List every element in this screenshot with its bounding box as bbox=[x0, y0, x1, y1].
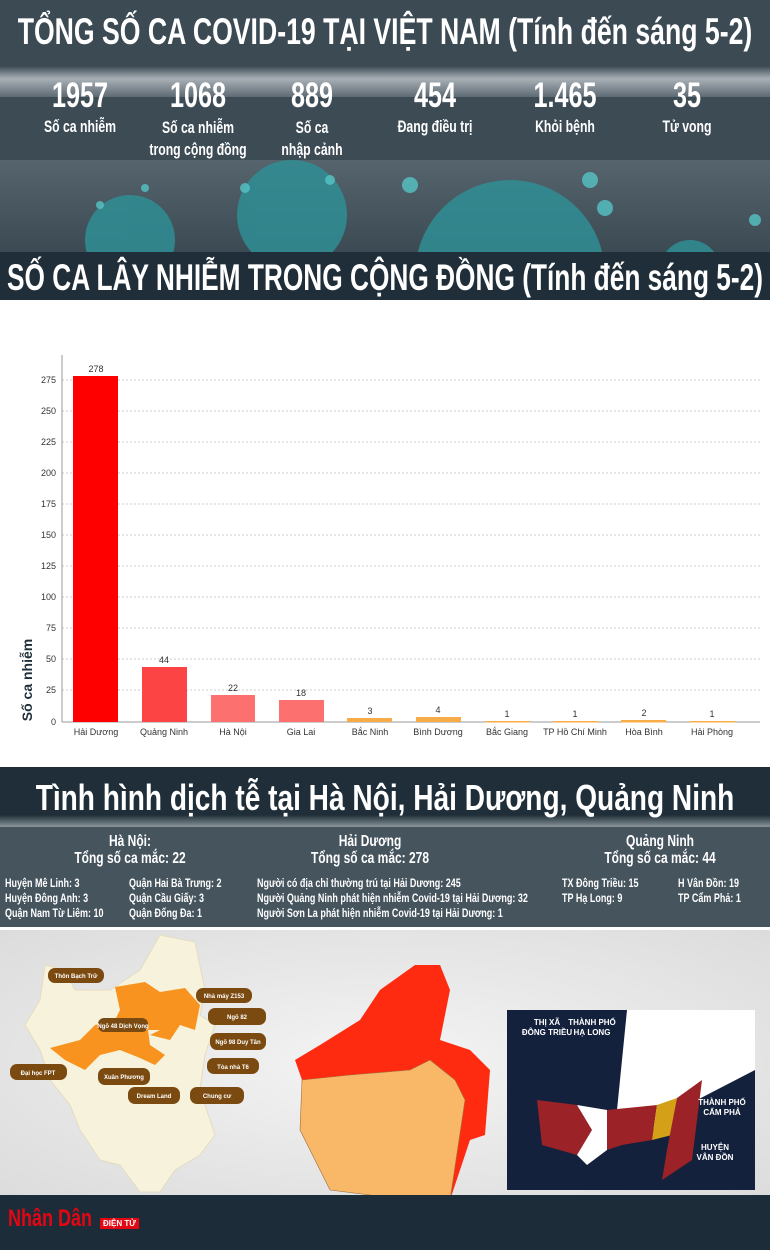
bar chart: Hải Phòng bbox=[691, 727, 733, 737]
Hà Nội block: Quận Cầu Giấy: 3 bbox=[129, 891, 204, 905]
bar chart: 75 bbox=[46, 623, 56, 633]
virus illustration band bbox=[0, 160, 770, 255]
bar chart: 22 bbox=[228, 683, 238, 693]
Quảng Ninh block: TP Cẩm Phả: 1 bbox=[678, 891, 741, 905]
stat 1957: 1957 bbox=[52, 76, 108, 115]
Quảng Ninh block: Quảng Ninh bbox=[626, 833, 694, 850]
stat 1.465 bbox=[533, 76, 597, 136]
header band: title bbox=[0, 0, 770, 66]
map: Quảng Ninh: HẠ LONG bbox=[574, 1028, 610, 1037]
Hải Dương block: Người Quảng Ninh phát hiện nhiễm Covid-19 tại Hải Dương: 32 bbox=[257, 891, 528, 905]
stat 1957 bbox=[44, 76, 116, 136]
bar chart: 18 bbox=[296, 688, 306, 698]
stat 889: nhập cảnh bbox=[281, 140, 343, 159]
section heading: epidemiology bbox=[0, 767, 770, 827]
section heading: community cases: SỐ CA LÂY NHIỄM TRONG CỘNG ĐỒNG (Tính đến sáng 5-2) bbox=[7, 257, 763, 298]
Hà Nội block: Hà Nội: bbox=[109, 833, 151, 850]
Hà Nội block: Quận Hai Bà Trưng: 2 bbox=[129, 876, 222, 890]
bar chart: 1 bbox=[709, 709, 715, 719]
bar chart: 44 bbox=[159, 655, 169, 665]
map: Quảng Ninh: THÀNH PHỐ bbox=[698, 1097, 746, 1107]
Quảng Ninh block: H Vân Đồn: 19 bbox=[678, 876, 739, 890]
Quảng Ninh block: Tổng số ca mắc: 44 bbox=[604, 850, 716, 867]
bar chart: Hải Dương bbox=[74, 727, 118, 737]
maps area bbox=[0, 930, 770, 1195]
bar chart: 278 bbox=[88, 364, 104, 374]
bar chart: 3 bbox=[367, 706, 373, 716]
Hà Nội block: Quận Nam Từ Liêm: 10 bbox=[5, 906, 104, 920]
panel: stats bbox=[0, 97, 770, 162]
Quảng Ninh block: TP Hạ Long: 9 bbox=[562, 891, 622, 905]
section heading: epidemiology: Tình hình dịch tễ tại Hà Nội, Hải Dương, Quảng Ninh bbox=[36, 777, 734, 818]
logo: Nhân Dân: ĐIỆN TỬ bbox=[103, 1219, 136, 1228]
Hà Nội block bbox=[5, 833, 222, 920]
stat 35: Tử vong bbox=[663, 117, 711, 136]
Hà Nội block: Huyện Mê Linh: 3 bbox=[5, 876, 80, 890]
stat 454 bbox=[398, 76, 472, 136]
map: Quảng Ninh: THÀNH PHỐ bbox=[568, 1017, 616, 1027]
Hà Nội block: Tổng số ca mắc: 22 bbox=[74, 850, 186, 867]
bar chart: Gia Lai bbox=[287, 727, 315, 737]
logo: Nhân Dân: Nhân Dân bbox=[8, 1205, 92, 1232]
map: Quảng Ninh: VÂN ĐỒN bbox=[697, 1152, 734, 1162]
bar chart: 100 bbox=[41, 592, 56, 602]
map: Hà Nội: Ngõ 98 Duy Tân bbox=[215, 1040, 261, 1046]
panel: region details bbox=[0, 827, 770, 927]
stat 889: 889 bbox=[291, 76, 333, 115]
map: Hải Dương bbox=[295, 965, 490, 1195]
map: Hà Nội: Ngõ 82 bbox=[227, 1015, 248, 1021]
bar chart: 200 bbox=[41, 468, 56, 478]
stat 889 bbox=[281, 76, 343, 159]
Hà Nội block: Huyện Đông Anh: 3 bbox=[5, 891, 88, 905]
bar chart: Bắc Giang bbox=[486, 727, 528, 737]
stat 1068 bbox=[149, 76, 246, 159]
map: Quảng Ninh: ĐÔNG TRIỀU bbox=[522, 1027, 572, 1037]
title: TỔNG SỐ CA COVID-19 TẠI VIỆT NAM (Tính đến sáng 5-2) bbox=[18, 11, 752, 52]
bar chart: 1 bbox=[504, 709, 510, 719]
bar chart: TP Hồ Chí Minh bbox=[543, 727, 607, 737]
bar chart: 275 bbox=[41, 375, 56, 385]
stat 1.465: 1.465 bbox=[533, 76, 597, 115]
logo: Nhân Dân bbox=[8, 1205, 139, 1232]
stat 1068: Số ca nhiễm bbox=[161, 118, 234, 137]
Hải Dương block: Người Sơn La phát hiện nhiễm Covid-19 tại Hải Dương: 1 bbox=[257, 906, 503, 920]
bar chart: 175 bbox=[41, 499, 56, 509]
map: Hà Nội: Xuân Phương bbox=[104, 1075, 144, 1081]
bar chart bbox=[0, 300, 770, 767]
Hải Dương block bbox=[257, 833, 528, 920]
map: Hà Nội: Thôn Bạch Trữ bbox=[55, 974, 98, 980]
map: Hà Nội: Nhà máy Z153 bbox=[204, 994, 245, 1000]
Hải Dương block: Hải Dương bbox=[339, 833, 401, 850]
stat 889: Số ca bbox=[296, 118, 328, 137]
stat 1.465: Khỏi bệnh bbox=[535, 117, 595, 136]
bar chart: Bình Dương bbox=[413, 727, 463, 737]
bar chart: 25 bbox=[46, 685, 56, 695]
map: Hà Nội bbox=[10, 934, 266, 1192]
stat 35 bbox=[662, 76, 711, 136]
bar chart: 150 bbox=[41, 530, 56, 540]
Hải Dương block: Tổng số ca mắc: 278 bbox=[311, 850, 429, 867]
map: Quảng Ninh: CẨM PHẢ bbox=[703, 1108, 741, 1117]
bar chart: Bắc Ninh bbox=[352, 727, 388, 737]
bar chart: 1 bbox=[572, 709, 578, 719]
bar chart: 225 bbox=[41, 437, 56, 447]
Quảng Ninh block: TX Đông Triều: 15 bbox=[562, 876, 639, 890]
map: Quảng Ninh: HUYỆN bbox=[701, 1143, 729, 1152]
bar chart: 125 bbox=[41, 561, 56, 571]
footer bbox=[0, 1195, 770, 1250]
map: Quảng Ninh: THỊ XÃ bbox=[534, 1018, 560, 1027]
map: Hà Nội: Đại học FPT bbox=[21, 1071, 56, 1077]
map: Quảng Ninh bbox=[507, 1010, 755, 1190]
Hải Dương block: Người có địa chỉ thường trú tại Hải Dương: 245 bbox=[257, 876, 461, 890]
bar chart: 2 bbox=[641, 708, 647, 718]
bar chart: Hòa Bình bbox=[625, 727, 663, 737]
stat 454: 454 bbox=[414, 76, 456, 115]
stat 1957: Số ca nhiễm bbox=[44, 117, 116, 136]
Quảng Ninh block bbox=[562, 833, 741, 905]
map: Hà Nội: Dream Land bbox=[137, 1094, 172, 1100]
bar chart: Hà Nội bbox=[219, 727, 247, 737]
bar chart: 250 bbox=[41, 406, 56, 416]
map: Hà Nội: Chung cư bbox=[203, 1094, 232, 1100]
stat 1068: trong cộng đồng bbox=[149, 140, 246, 159]
stat 1068: 1068 bbox=[169, 76, 226, 115]
bar chart: 4 bbox=[435, 705, 441, 715]
stat 35: 35 bbox=[673, 76, 701, 115]
map: Hà Nội: Ngõ 48 Dịch Vọng bbox=[97, 1024, 149, 1030]
y-axis label: Số ca nhiễm bbox=[19, 639, 35, 721]
bar chart: 0 bbox=[51, 717, 56, 727]
Hà Nội block: Quận Đống Đa: 1 bbox=[129, 906, 202, 920]
bar chart: Quảng Ninh bbox=[140, 727, 188, 737]
map: Hà Nội: Tòa nhà T6 bbox=[217, 1065, 249, 1071]
bar chart: 50 bbox=[46, 654, 56, 664]
stat 454: Đang điều trị bbox=[398, 117, 472, 136]
